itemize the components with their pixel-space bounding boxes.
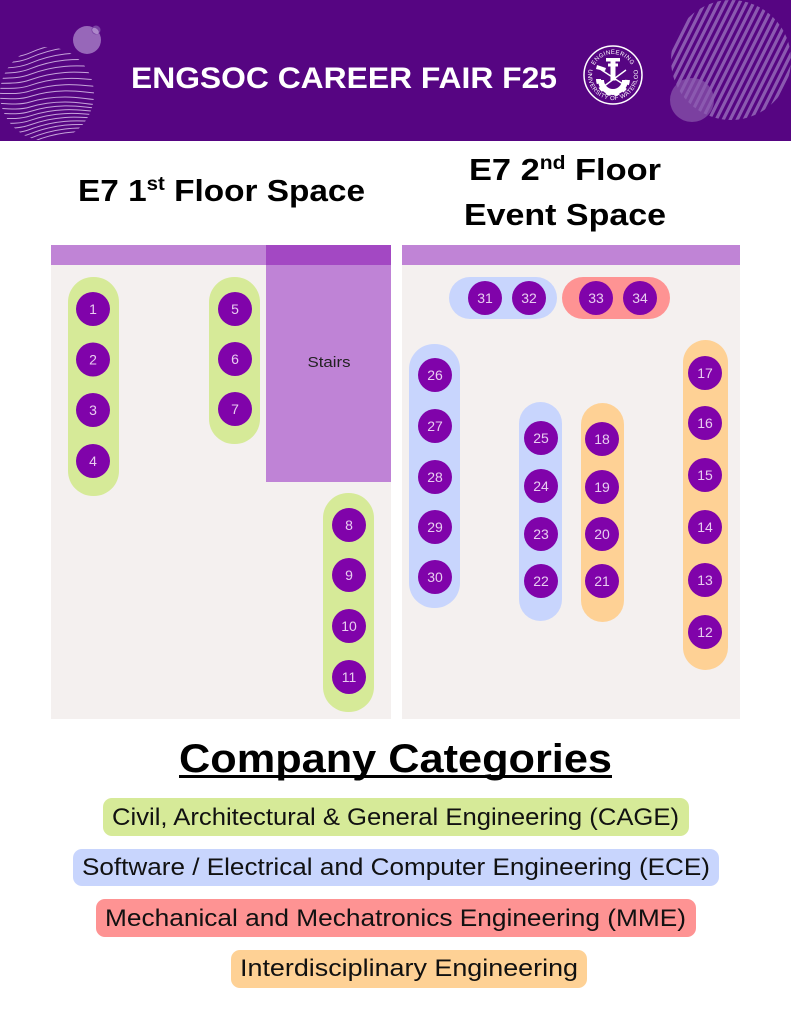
booth group 26-30: 27: [427, 418, 443, 434]
booth group 8-11: 10: [341, 618, 357, 634]
booth group 31-32: 31: [477, 290, 493, 306]
legend: MME: Mechanical and Mechatronics Engineering (MME): [105, 905, 686, 932]
heading: 2nd floor: nd: [540, 153, 565, 174]
booth group 22-25: 24: [533, 478, 549, 494]
heading: 2nd floor: Event Space: [464, 197, 666, 232]
booth group 22-25: [519, 402, 562, 621]
legend: ECE: [73, 849, 719, 886]
booth group 26-30: 30: [427, 569, 443, 585]
legend: interdisciplinary: Interdisciplinary Engineering: [240, 955, 578, 982]
legend heading: Company Categories: [179, 737, 612, 781]
booth group 22-25: 22: [533, 573, 549, 589]
decoration: striped circle: [671, 0, 791, 120]
legend: ECE: Software / Electrical and Computer Engineering (ECE): [82, 854, 710, 881]
booth group 18-21: 19: [594, 479, 610, 495]
booth group 1-4: 2: [89, 352, 97, 368]
booth group 12-17: 15: [697, 467, 713, 483]
booth group 12-17: 16: [697, 415, 713, 431]
booth group 26-30: 29: [427, 519, 443, 535]
panel: 2nd floor map: [402, 245, 740, 719]
booth group 8-11: 9: [345, 567, 353, 583]
panel: 1st floor map: [51, 245, 391, 719]
booth group 12-17: 12: [697, 624, 713, 640]
decoration: wavy circle: [0, 47, 94, 140]
title: ENGSOC CAREER FAIR F25: [131, 62, 557, 95]
decoration: bubble: [73, 26, 101, 54]
booth group 8-11: 8: [345, 517, 353, 533]
booth group 31-32: [449, 277, 557, 319]
legend: interdisciplinary: [231, 950, 587, 988]
booth group 18-21: 20: [594, 526, 610, 542]
booth group 12-17: 17: [697, 365, 713, 381]
heading: 1st floor: Floor Space: [165, 173, 365, 208]
booth group 1-4: 1: [89, 301, 97, 317]
stairs: Stairs: [308, 354, 350, 371]
stairs: [266, 245, 391, 482]
booth group 31-32: 32: [521, 290, 537, 306]
booth group 5-7: 6: [231, 351, 239, 367]
heading: 2nd floor: [464, 152, 666, 232]
booth group 33-34: [562, 277, 670, 319]
booth group 5-7: [209, 277, 260, 444]
booth group 12-17: 14: [697, 519, 713, 535]
logo: engineering crest: [583, 45, 643, 105]
booth group 1-4: [68, 277, 119, 496]
legend: CAGE: Civil, Architectural & General Engineering (CAGE): [112, 804, 679, 831]
legend: CAGE: [103, 798, 689, 836]
booth group 18-21: 18: [594, 431, 610, 447]
booth group 1-4: 4: [89, 453, 97, 469]
booth group 18-21: [581, 403, 624, 622]
booth group 26-30: 28: [427, 469, 443, 485]
booth group 5-7: 7: [231, 401, 239, 417]
booth group 26-30: [409, 344, 460, 608]
decoration: dotted circle: [670, 78, 714, 122]
booth group 22-25: 25: [533, 430, 549, 446]
booth group 33-34: 33: [588, 290, 604, 306]
booth group 33-34: 34: [632, 290, 648, 306]
booth group 1-4: 3: [89, 402, 97, 418]
logo: engineering crest: UNIVERSITY OF WATERLOO: [588, 70, 638, 100]
booth group 8-11: 11: [342, 669, 356, 685]
legend: MME: [96, 899, 696, 937]
logo: engineering crest: ENGINEERING: [591, 50, 634, 65]
booth group 26-30: 26: [427, 367, 443, 383]
booth group 5-7: 5: [231, 301, 239, 317]
booth group 12-17: 13: [697, 572, 713, 588]
booth group 22-25: 23: [533, 526, 549, 542]
heading: 1st floor: E7 1: [78, 173, 142, 208]
heading: 1st floor: st: [147, 174, 166, 195]
header banner: [0, 0, 791, 141]
booth group 8-11: [323, 493, 374, 712]
booth group 12-17: [683, 340, 728, 670]
booth group 18-21: 21: [594, 573, 610, 589]
heading: 2nd floor: Floor: [565, 152, 661, 187]
heading: 2nd floor: E7 2: [469, 152, 533, 187]
